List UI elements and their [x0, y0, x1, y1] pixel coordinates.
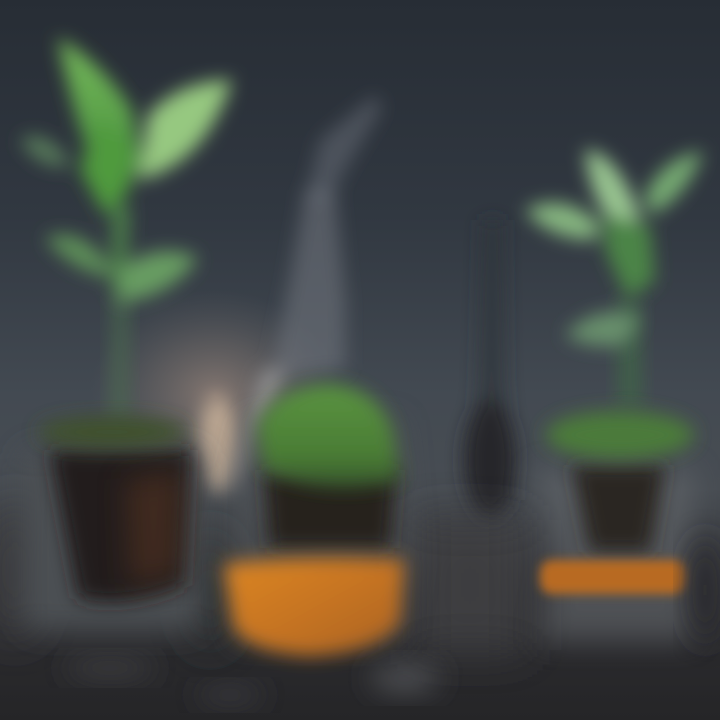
left pot body [50, 450, 190, 602]
left glass [22, 450, 202, 630]
right plant leaves [525, 150, 703, 346]
dark tower [464, 220, 516, 520]
right pot [535, 411, 695, 640]
right orange band [540, 560, 686, 594]
left plant stem [110, 290, 130, 420]
mid ground haze [0, 500, 525, 650]
centre moss [258, 384, 400, 488]
right glass [535, 470, 695, 640]
centre soil [264, 470, 396, 548]
ground rubble [65, 535, 720, 704]
left plant leaves [20, 38, 232, 302]
light streak [228, 95, 382, 500]
warm light core [198, 397, 238, 493]
centre glass [225, 420, 412, 640]
right moss [546, 411, 694, 459]
centre pot [224, 384, 412, 656]
right plant [525, 150, 703, 405]
left pot [22, 416, 202, 630]
left plant [20, 38, 232, 420]
right soil [572, 465, 665, 552]
right plant stem [618, 300, 642, 405]
background glow [90, 290, 340, 500]
centre orange pot [224, 558, 404, 656]
left pot soil [38, 416, 186, 448]
